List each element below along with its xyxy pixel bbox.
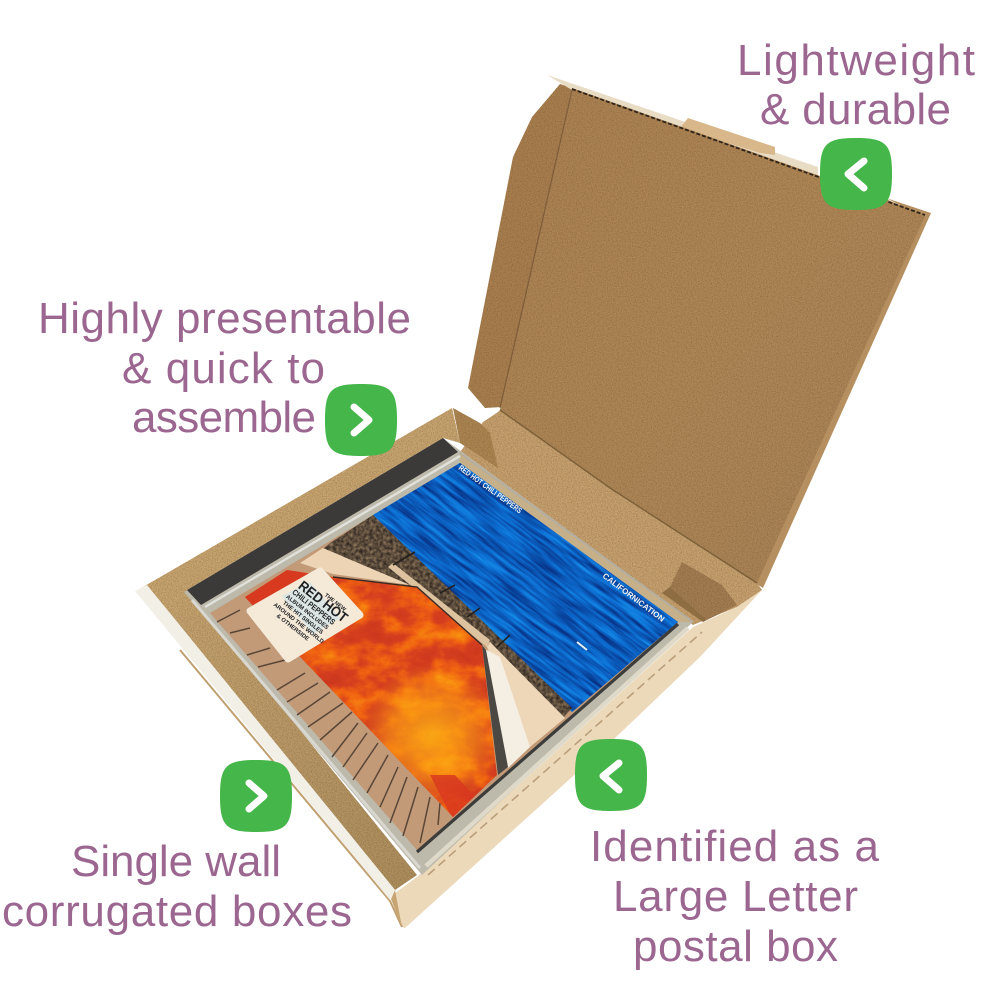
icon: left chevron badge (575, 739, 647, 811)
case lower rim highlight (426, 628, 688, 866)
pier posts (393, 552, 510, 647)
text: identified as a large letter postal box: Large Letter (613, 872, 858, 921)
base floor on the left (147, 585, 417, 890)
lid right edge strip (755, 198, 931, 588)
icon: right chevron badge (325, 384, 397, 456)
silver rail under spine (205, 456, 460, 607)
base top-left wall (136, 408, 460, 613)
blue sea (373, 463, 678, 712)
outer brown edge (180, 650, 402, 927)
beige pool road (487, 642, 565, 747)
album title: CALIFORNICATION (601, 571, 666, 624)
text: highly presentable and quick to assemble: & quick to (122, 344, 325, 393)
cover lower rim dark line (417, 624, 678, 852)
concrete walkway (388, 563, 490, 647)
sticker text: ALBUM INCLUDES (284, 594, 329, 631)
text: single wall corrugated boxes: Single wall (71, 837, 281, 886)
front wall shadow line (428, 632, 702, 875)
callout: lightweight and durable (737, 36, 975, 210)
case upper right line (460, 453, 693, 622)
case left band highlight (192, 600, 420, 868)
lid top edge strip (547, 75, 818, 175)
lid inner panel (500, 88, 925, 583)
white pool road (483, 648, 530, 768)
callout: single wall corrugated boxes (2, 760, 352, 936)
concrete wedge (300, 548, 410, 585)
album cover backing (210, 463, 678, 850)
red hot sticker (250, 571, 360, 659)
lid locking tab (680, 118, 775, 155)
black spine (187, 438, 458, 605)
sticker text (268, 571, 352, 653)
icon: left chevron badge (820, 138, 892, 210)
right flap shadow (662, 587, 707, 622)
lid side fold line (500, 90, 572, 408)
sticker text: THE HIT SINGLES (281, 601, 324, 636)
sticker text: AROUND THE WORLD (272, 602, 325, 645)
lid top edge corrugation line (572, 89, 925, 215)
right corner flap (670, 562, 737, 620)
rocky shoreline (320, 510, 575, 722)
text: highly presentable and quick to assemble: Highly presentable (38, 294, 411, 343)
sticker highlight (282, 582, 340, 634)
text: single wall corrugated boxes: corrugated boxes (2, 887, 352, 936)
front wall (395, 590, 762, 928)
text: lightweight and durable: Lightweight (737, 36, 975, 85)
callout: highly presentable and quick to assemble (38, 294, 411, 456)
text: single wall corrugated boxes (2, 837, 352, 936)
sticker text: THE NEW (323, 593, 347, 613)
rear fold line (500, 410, 757, 583)
sticker text: RED HOT (295, 577, 351, 626)
callout: identified as a large letter postal box (575, 739, 880, 971)
lid side flap (468, 84, 572, 408)
text: identified as a large letter postal box: postal box (633, 922, 838, 971)
sticker text: CHILI PEPPERS (290, 588, 337, 627)
box base (135, 408, 762, 928)
text: lightweight and durable (737, 36, 975, 134)
text: highly presentable and quick to assemble (38, 294, 411, 442)
CD jewel case (184, 438, 694, 875)
pool top edge line (333, 577, 482, 645)
base rear floor panel (460, 410, 762, 625)
text: identified as a large letter postal box: Identified as a (590, 822, 880, 871)
white left strip (135, 585, 395, 900)
album band name: RED HOT CHILI PEPPERS (457, 463, 524, 516)
text: lightweight and durable: & durable (760, 85, 951, 134)
icon: right chevron badge (220, 760, 292, 832)
pool edge (482, 645, 508, 775)
case upper right edge (460, 452, 693, 622)
clear plastic case (184, 438, 693, 875)
deck (210, 597, 453, 850)
top corner flap (453, 408, 498, 468)
open lid of the box (468, 75, 931, 588)
sticker text: & OTHERSIDE (275, 613, 310, 643)
text: identified as a large letter postal box (590, 822, 880, 971)
front corner fold (391, 890, 402, 927)
text: highly presentable and quick to assemble: assemble (132, 393, 316, 442)
orange pool (245, 570, 497, 817)
